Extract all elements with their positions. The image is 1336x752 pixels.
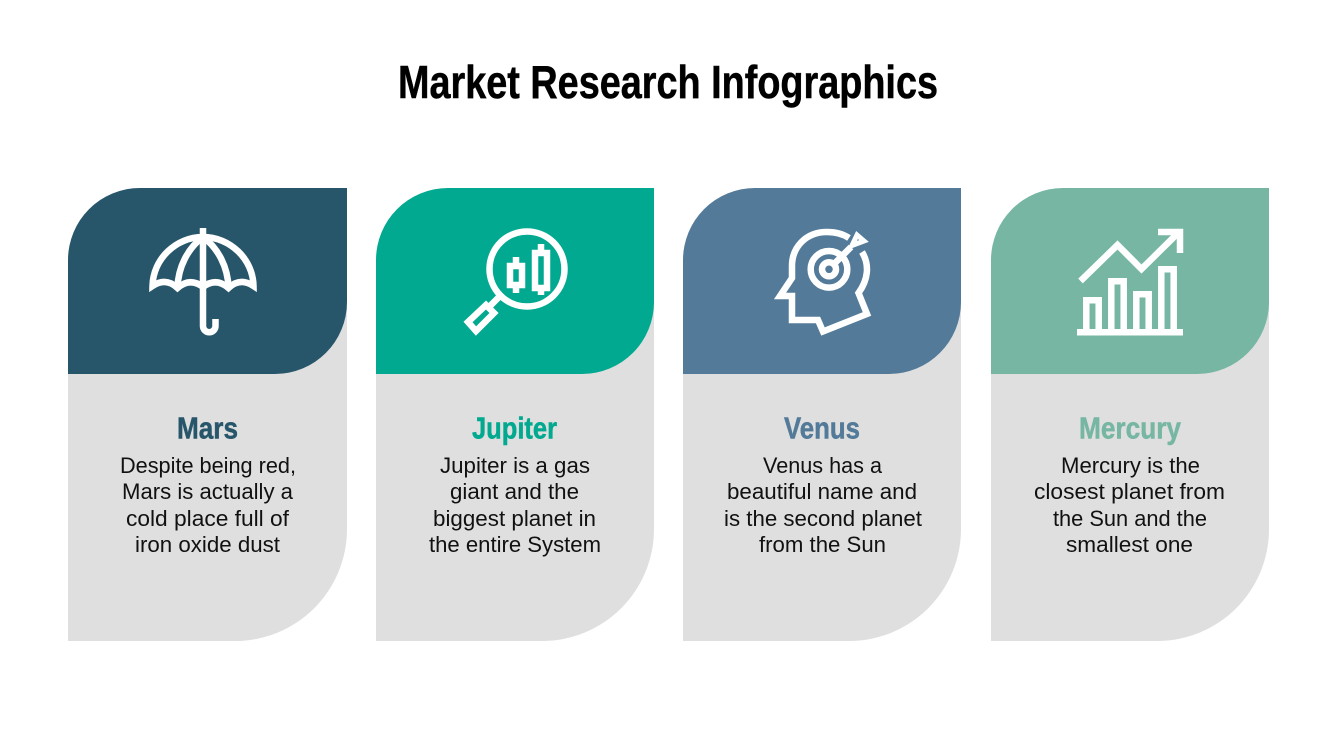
card header: Jupiter <box>376 188 654 374</box>
heading: Jupiter: Jupiter <box>472 410 557 446</box>
icon: umbrella <box>152 228 254 332</box>
text: Venus description <box>724 453 922 557</box>
text: Jupiter description: biggest planet in <box>433 506 596 531</box>
icon: growth chart <box>1077 232 1183 332</box>
heading: Venus: Venus <box>784 410 860 446</box>
icon: magnifier with candlesticks <box>468 232 564 331</box>
text: Venus description: from the Sun <box>759 532 886 557</box>
text: Venus description: Venus has a <box>763 453 883 478</box>
card header: Venus <box>683 188 961 374</box>
heading: Mars: Mars <box>177 410 238 446</box>
text: Mercury description: closest planet from <box>1034 479 1225 504</box>
text: Venus description: is the second planet <box>724 506 922 531</box>
text: Jupiter description: the entire System <box>429 532 601 557</box>
icon: head with target <box>780 232 867 332</box>
text: Venus description: beautiful name and <box>727 479 917 504</box>
heading: Mercury: Mercury <box>1079 410 1182 446</box>
panel: Mars <box>68 188 347 641</box>
card body: Mercury <box>991 290 1269 641</box>
text: Mercury description: smallest one <box>1066 532 1193 557</box>
text: Mercury description: Mercury is the <box>1061 453 1200 478</box>
card header: Mars <box>68 188 347 374</box>
panel: Mercury <box>991 188 1269 641</box>
card body: Venus <box>683 290 961 641</box>
text: Mars description: cold place full of <box>126 506 290 531</box>
title: Market Research Infographics <box>398 56 938 108</box>
text: Mars description <box>120 453 296 557</box>
text: Mars description: Despite being red, <box>120 453 296 478</box>
card body: Jupiter <box>376 290 654 641</box>
card header: Mercury <box>991 188 1269 374</box>
text: Mercury description <box>1034 453 1225 557</box>
panel: Jupiter <box>376 188 654 641</box>
panel: Venus <box>683 188 961 641</box>
text: Jupiter description: giant and the <box>450 479 579 504</box>
text: Jupiter description: Jupiter is a gas <box>440 453 590 478</box>
text: Jupiter description <box>429 453 601 557</box>
text: Mercury description: the Sun and the <box>1053 506 1207 531</box>
text: Mars description: iron oxide dust <box>135 532 280 557</box>
text: Mars description: Mars is actually a <box>122 479 294 504</box>
card body: Mars <box>68 290 347 641</box>
